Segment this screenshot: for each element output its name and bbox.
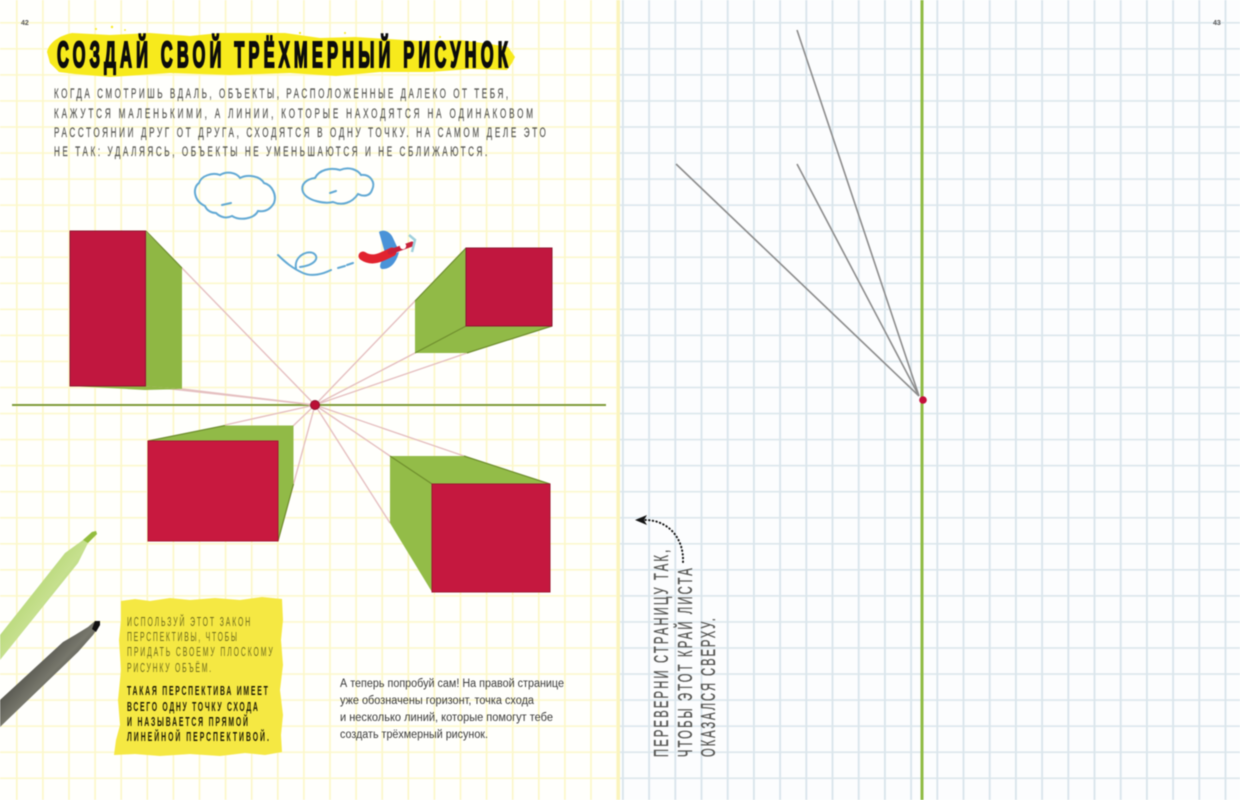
callout: perspective note: ЛИНЕЙНОЙ ПЕРСПЕКТИВОЙ. [127, 729, 269, 745]
right page horizon line [920, 0, 924, 800]
text block: try it yourself: и несколько линий, которые помогут тебе [340, 712, 553, 724]
callout: perspective note: И НАЗЫВАЕТСЯ ПРЯМОЙ [127, 714, 248, 730]
horizon line [12, 404, 606, 406]
box bottom right [390, 456, 550, 592]
rotated instruction text: ПЕРЕВЕРНИ СТРАНИЦУ ТАК, [651, 550, 673, 757]
icon: cloud left [195, 173, 275, 219]
rotated instruction text [651, 550, 720, 757]
arrow: turn the page [635, 515, 683, 562]
rotated instruction text: ЧТОБЫ ЭТОТ КРАЙ ЛИСТА [673, 568, 697, 757]
box top right [415, 248, 552, 353]
intro text: КАЖУТСЯ МАЛЕНЬКИМИ, А ЛИНИИ, КОТОРЫЕ НАХОДЯТСЯ НА ОДИНАКОВОМ [54, 107, 533, 122]
callout: perspective note: ИСПОЛЬЗУЙ ЭТОТ ЗАКОН [127, 614, 250, 630]
icon: dark marker [0, 621, 100, 727]
icon: light green marker [0, 531, 97, 660]
callout: perspective note: РИСУНКУ ОБЪЁМ. [127, 661, 211, 676]
right page guide lines [676, 30, 919, 396]
text block: try it yourself: уже обозначены горизонт, точка схода [340, 695, 535, 707]
intro text [54, 87, 546, 160]
callout: perspective note: ПРИДАТЬ СВОЕМУ ПЛОСКОМУ [127, 646, 273, 660]
right page background [620, 0, 1240, 800]
icon: cloud right [302, 168, 373, 204]
callout: perspective note: ПЕРСПЕКТИВЫ, ЧТОБЫ [127, 631, 237, 645]
construction lines [145, 268, 467, 541]
callout: perspective note: ВСЕГО ОДНУ ТОЧКУ СХОДА [127, 701, 258, 715]
text block: try it yourself [340, 678, 564, 741]
box bottom left [148, 426, 294, 541]
intro text: КОГДА СМОТРИШЬ ВДАЛЬ, ОБЪЕКТЫ, РАСПОЛОЖЕННЫЕ ДАЛЕКО ОТ ТЕБЯ, [54, 87, 508, 102]
page number left: 42 [21, 20, 29, 27]
callout: perspective note [114, 597, 283, 756]
intro text: НЕ ТАК: УДАЛЯЯСЬ, ОБЪЕКТЫ НЕ УМЕНЬШАЮТСЯ И НЕ СБЛИЖАЮТСЯ. [54, 145, 487, 160]
rotated instruction text: ОКАЗАЛСЯ СВЕРХУ. [698, 618, 720, 757]
text block: try it yourself: А теперь попробуй сам! На правой странице [340, 678, 564, 690]
vanishing point [310, 400, 320, 410]
text block: try it yourself: создать трёхмерный рисунок. [340, 729, 488, 741]
title highlight [47, 26, 515, 77]
left page background [0, 0, 620, 800]
intro text: РАССТОЯНИИ ДРУГ ОТ ДРУГА, СХОДЯТСЯ В ОДНУ ТОЧКУ. НА САМОМ ДЕЛЕ ЭТО [54, 126, 546, 141]
right page vanishing point [919, 396, 927, 404]
box top left [70, 231, 182, 390]
perspective diagram [12, 231, 606, 592]
title: СОЗДАЙ СВОЙ ТРЁХМЕРНЫЙ РИСУНОК [57, 34, 508, 75]
page number right: 43 [1213, 20, 1221, 27]
callout: perspective note: ТАКАЯ ПЕРСПЕКТИВА ИМЕЕТ [127, 685, 268, 699]
icon: airplane with trail [278, 231, 415, 275]
